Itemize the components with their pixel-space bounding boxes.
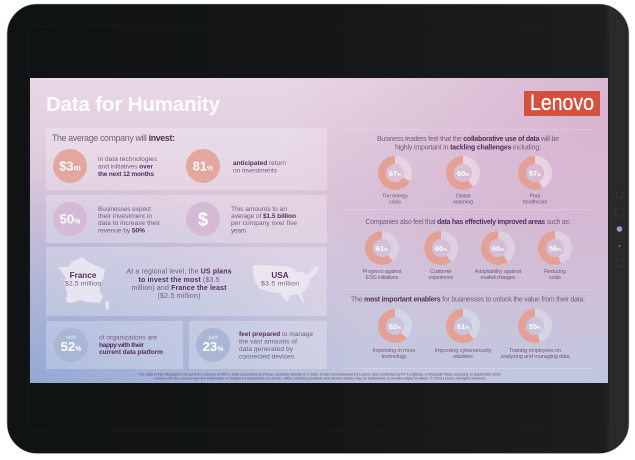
donut: 57% poor healthcare: healthcare — [522, 200, 548, 206]
donut: 67% energy crisis: crisis — [389, 200, 401, 206]
donut: 60% global warming: Global — [456, 194, 470, 200]
donut: 61% ESG — [362, 235, 402, 281]
text: organizations happy: current data platform — [99, 349, 163, 356]
stat: 81% — [186, 149, 220, 183]
title: Data for Humanity — [46, 93, 221, 116]
donut: 61% ESG: ESG initiatives — [366, 275, 399, 281]
text: anticipated return — [233, 160, 286, 174]
stat: 50% — [53, 202, 87, 236]
map: USA: USA — [271, 271, 289, 280]
donut: 55% training employees: 55% — [529, 322, 541, 331]
text: $1.5 billion: years — [231, 228, 247, 234]
heading: data has improved areas: Companies also feel that data has effectively improved areas such as: — [366, 219, 571, 226]
panel: average company invest — [46, 128, 327, 190]
stat: 50%: 50% — [60, 212, 81, 226]
footnote: Lenovo and the Lenovo logo are trademarks or registered trademarks of Lenovo. Other company products and service names may be trademarks or service marks of others. © 2023 Lenovo. All rights reserved. — [154, 376, 486, 380]
screen background — [30, 78, 608, 383]
panel: regional — [46, 247, 327, 316]
heading: collaborative use of data — [377, 136, 559, 152]
donut: 61% cybersecurity: 61% — [457, 322, 469, 331]
panel: 52% happy — [46, 321, 183, 369]
text: regional level: ($2.5 million) — [158, 293, 200, 300]
text: feel prepared: the vast amounts of — [239, 338, 297, 346]
text: $1.5 billion — [231, 206, 297, 234]
text: regional level: million) and France the least — [132, 285, 227, 292]
text: $1.5 billion: per company over five — [231, 220, 297, 227]
donut: 55% training employees: analyzing and managing data — [500, 354, 570, 360]
map: USA — [253, 265, 319, 304]
donut: 55% training employees: Training employees on — [509, 348, 561, 354]
donut: 60% adaptability: 60% — [492, 244, 504, 253]
text: businesses expect: revenue by 50% — [98, 228, 145, 234]
text: feel prepared — [239, 331, 313, 360]
panel heading: The average company will invest: — [52, 133, 175, 143]
donut: 60% adaptability: market changes — [480, 275, 516, 281]
donut: 60% global warming: 60% — [457, 169, 469, 178]
donut: 67% energy crisis: The energy — [382, 194, 408, 200]
stat: $3m: $3m — [59, 158, 81, 174]
footnote: The data in this infographic comes from a survey of 500 C-suite executives and those reporting directly to C-suite. It was commissioned by Lenovo and conducted by FT Longitude, a Financial Times company, in September 2022. — [138, 372, 502, 376]
text: regional level: At a regional level, the US plans — [126, 269, 232, 276]
stat: $3m — [53, 149, 87, 183]
donut: 61% ESG: 61% — [376, 244, 388, 253]
donut: 56% reducing costs: costs — [549, 275, 561, 281]
heading: collaborative use of data: highly important in tackling challenges including: — [395, 144, 541, 152]
donut: 56% reducing costs: 56% — [549, 244, 561, 253]
donut: 60% customer experience: Customer — [430, 269, 452, 275]
donut: 61% ESG: Progress against — [362, 269, 402, 275]
donut: 57% poor healthcare: 57% — [529, 169, 541, 178]
stat: 52%: only — [66, 335, 76, 341]
text: organizations happy: happy with their — [99, 342, 144, 349]
footnote — [138, 372, 502, 380]
stat: 23%: just — [207, 335, 218, 341]
text: in data technologies: in data technologies — [98, 156, 158, 163]
map: France — [58, 257, 109, 310]
stat: 81%: 81% — [193, 160, 214, 174]
donut: 60% global warming — [450, 160, 476, 206]
text: businesses expect: their investment in — [98, 213, 152, 220]
logo: Lenovo: Lenovo — [530, 90, 594, 115]
donut: 62% technology — [372, 313, 416, 360]
donut: 60% customer experience: 60% — [435, 244, 447, 253]
text: businesses expect: Businesses expect — [98, 206, 151, 213]
text: in data technologies — [98, 156, 158, 178]
text: businesses expect: data to increase their — [98, 220, 161, 227]
donut: 55% training employees — [500, 313, 570, 360]
text: organizations happy: of organizations are — [99, 334, 157, 342]
map: USA: $3.5 million — [261, 280, 299, 288]
donut: 67% energy crisis: 67% — [389, 169, 401, 178]
text: businesses expect — [98, 206, 161, 234]
donut: 62% technology: 62% — [389, 322, 401, 331]
donut: 60% global warming: warming — [452, 200, 473, 206]
donut: 67% energy crisis — [382, 160, 408, 206]
map: France: France — [70, 271, 97, 280]
donut: 60% customer experience: experience — [428, 275, 454, 281]
donut: 56% reducing costs: Reducing — [544, 269, 566, 275]
text: feel prepared: data generated by — [239, 346, 294, 353]
donut: 62% technology: Improving in more — [372, 348, 416, 354]
text: regional level — [126, 269, 232, 300]
donut: 61% cybersecurity — [434, 313, 492, 360]
text: feel prepared: feel prepared to manage — [239, 331, 313, 338]
text: feel prepared: connected devices — [239, 354, 295, 360]
donut: 57% poor healthcare: Poor — [530, 194, 541, 200]
donut: 60% adaptability: Adaptability against — [474, 269, 522, 275]
text: $1.5 billion: This amounts to an — [231, 206, 287, 213]
text: anticipated return: on investments — [233, 168, 278, 174]
icon: dollar: $ — [198, 210, 208, 230]
donut: 62% technology: technology — [382, 354, 407, 360]
donut: 60% customer experience — [428, 235, 454, 281]
text: in data technologies: the next 12 months — [98, 171, 154, 178]
text: regional level: to invest the most ($3.5 — [138, 277, 220, 284]
text: organizations happy — [99, 334, 163, 356]
text: anticipated return: anticipated return — [233, 160, 286, 167]
text: $1.5 billion: average of $1.5 billion — [231, 213, 296, 220]
text: in data technologies: and initiatives over — [98, 164, 153, 170]
heading: collaborative use of data: Business leaders feel that the collaborative use of data will be — [377, 136, 559, 143]
panel: 23% prepared — [189, 321, 327, 369]
donut: 61% cybersecurity: solutions — [453, 354, 473, 360]
icon: dollar — [186, 202, 220, 236]
stat: 23% — [196, 328, 230, 362]
donut: 57% poor healthcare — [522, 160, 548, 206]
panel: business expectation — [46, 195, 327, 243]
heading: most important enablers: The most important enablers for businesses to unlock the value from their data: — [351, 296, 585, 304]
stat: 52%: 52% — [61, 339, 82, 354]
map: France: $2.5 million — [65, 280, 101, 288]
stat: 23%: 23% — [203, 339, 224, 354]
donut: 61% cybersecurity: Improving cybersecurity — [434, 348, 492, 354]
donut: 56% reducing costs — [542, 235, 568, 281]
donut: 60% adaptability — [474, 235, 522, 281]
stat: 52% — [54, 328, 88, 362]
